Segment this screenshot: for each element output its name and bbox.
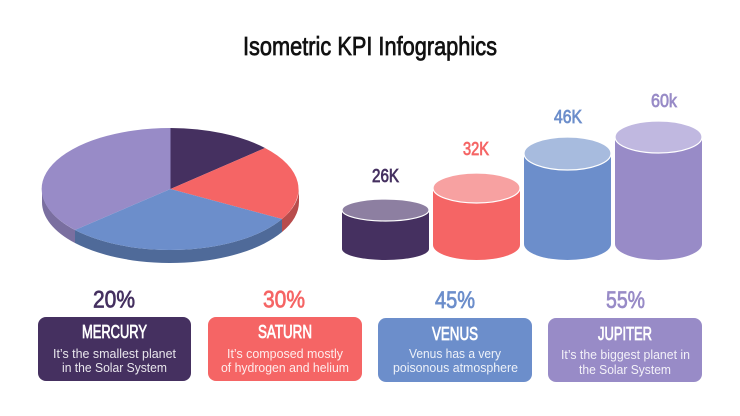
value label: 26K: 26K (372, 166, 399, 186)
pie side: blue (75, 219, 282, 263)
panel: venus (378, 318, 532, 382)
title: Isometric KPI Infographics (243, 31, 497, 61)
pie chart (42, 128, 299, 263)
pie side: red (282, 189, 299, 232)
percent: 55%: 55% (606, 287, 645, 314)
panel: saturn (208, 317, 362, 381)
text: saturn line 2: of hydrogen and helium (221, 361, 349, 375)
value label: 32K: 32K (463, 139, 489, 159)
text: mercury line 1: It’s the smallest planet (53, 347, 177, 361)
pie side: purple (42, 189, 75, 243)
pie slice: dark (170, 128, 265, 189)
text: mercury line 2: in the Solar System (62, 361, 167, 375)
pie slice: red (170, 148, 299, 219)
panel: mercury (38, 317, 191, 381)
cylinder: 60k (615, 121, 702, 260)
text: venus line 2: poisonous atmosphere (393, 361, 518, 375)
heading: venus: VENUS (432, 324, 478, 344)
cylinder: 46K (524, 137, 611, 260)
cylinder: 32K (433, 173, 520, 260)
value label: 60k: 60k (651, 91, 678, 111)
percent: 20%: 20% (93, 286, 135, 314)
panel: jupiter (548, 318, 702, 382)
text: saturn line 1: It’s composed mostly (227, 347, 344, 361)
heading: saturn: SATURN (258, 322, 312, 342)
cylinder chart (342, 121, 702, 260)
percent: 45%: 45% (435, 287, 475, 314)
text: jupiter line 1: It’s the biggest planet in (561, 348, 690, 362)
cylinder: 26K (342, 199, 429, 260)
percent: 30%: 30% (263, 286, 305, 314)
heading: mercury: MERCURY (82, 322, 147, 342)
text: venus line 1: Venus has a very (409, 347, 502, 361)
heading: jupiter: JUPITER (598, 324, 652, 344)
value label: 46K: 46K (554, 107, 582, 127)
pie slice: purple (42, 128, 170, 230)
text: jupiter line 2: the Solar System (579, 363, 671, 377)
pie slice: blue (75, 189, 282, 250)
